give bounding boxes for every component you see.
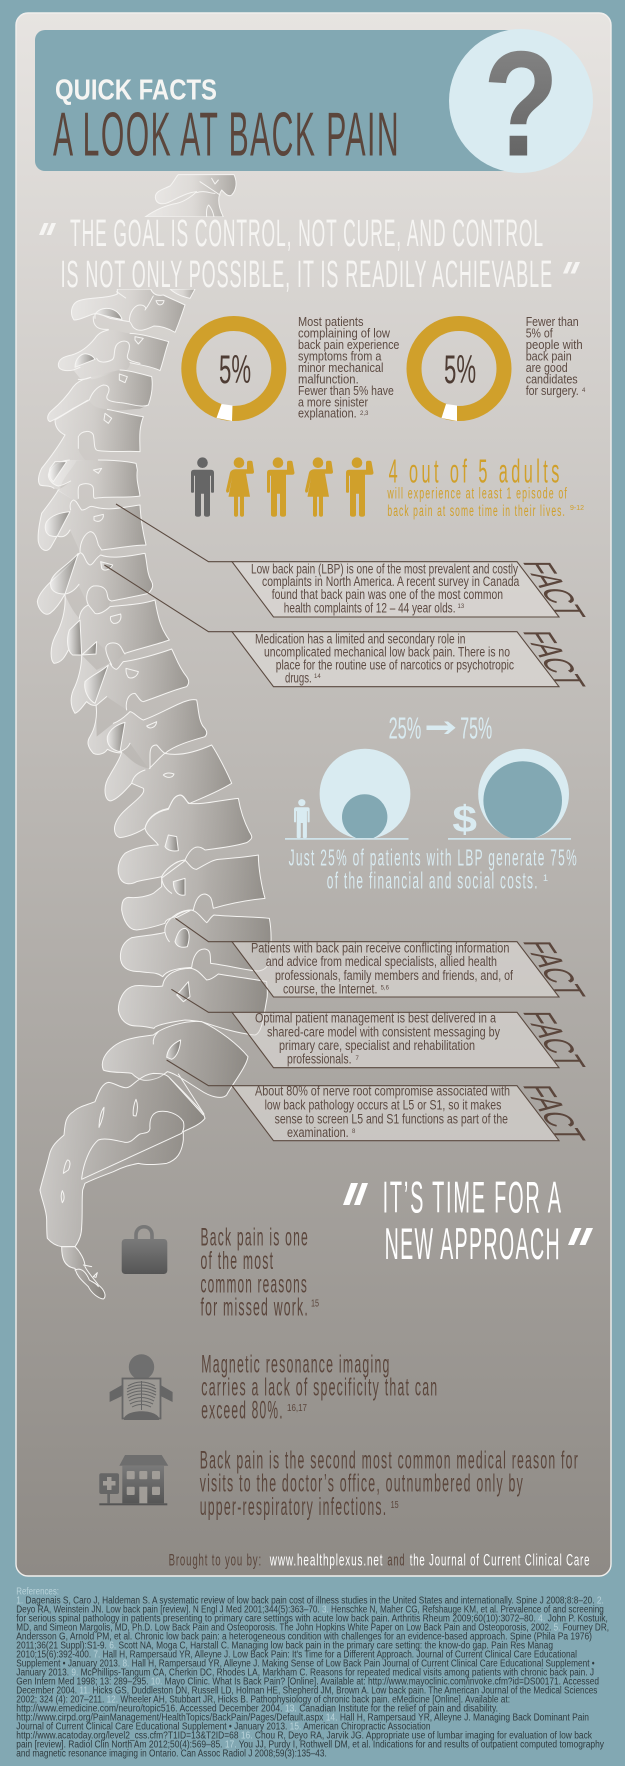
text: 4 out of 5 adults: 9-12 [570,505,584,512]
fact text: found that back pain was one of the most common [272,587,503,602]
reference list: for serious spinal pathology in patients presenting to primary care settings with acute low back pain. Arthritis Rheum 2009;60(10):3072–80. 4. John P. Kostuik, [16,1613,608,1624]
text: fewer than 5 percent: back pain [526,349,572,364]
text: most patients: minor mechanical [298,360,383,375]
title banner [35,20,593,188]
text: most patients: symptoms from a [298,349,382,364]
fact text: professionals. [287,1052,352,1067]
fact text: primary care, specialist and rehabilitation [279,1038,475,1053]
fact text: course, the Internet. [283,982,377,997]
icon: gold man [346,457,374,517]
box [232,632,559,687]
text: just 25 percent [289,845,578,893]
label: 25% arrow 75% [389,711,492,746]
text: fewer than 5 percent: 4 [582,388,586,394]
fact text: Patients with back pain receive conflicting information [251,940,509,955]
quote: new approach [343,1173,593,1269]
text: most patients: Fewer than 5% have [298,383,394,398]
text: second most common: 15 [391,1500,399,1511]
spine illustration [37,175,271,1299]
text: second most common [200,1447,579,1521]
fact text: place for the routine use of narcotics or psychotropic [276,658,514,673]
reference list: and magnetic resonance imaging in Ontario. Can Assoc Radiol J 2008;59(3):135–43. [16,1748,327,1759]
text: magnetic resonance: exceed 80%. [201,1396,284,1424]
text: most patients: a more sinister [298,394,369,409]
fact text: About 80% of nerve root compromise associated with [255,1084,510,1099]
text: back pain missed work: for missed work. [200,1293,309,1321]
text: back pain missed work [200,1224,319,1321]
fact text: 7 [356,1056,360,1062]
fact box: nerve root compromise [167,1060,593,1141]
heading: quick facts: QUICK FACTS [55,74,217,106]
fact text [251,940,513,997]
fact text: uncomplicated mechanical low back pain. There is no [264,645,510,660]
FACT label: FACT [513,1011,593,1068]
text: second most common: upper-respiratory infections. [200,1493,387,1521]
fact box: conflicting information [175,918,593,997]
fact text: sense to screen L5 and S1 functions as part of the [275,1111,508,1126]
text: most patients [298,314,399,421]
stat: donut 5 percent mechanical [189,314,399,421]
credit line: www.healthplexus.net [269,1551,383,1570]
leader line [116,504,232,562]
stat: donut 5 percent surgery [414,314,586,421]
fact text [251,561,520,615]
text: fewer than 5 percent: 5% of [526,326,553,341]
text: fewer than 5 percent: candidates [526,371,578,386]
fact text [255,1084,510,1140]
fact text: 8 [352,1129,356,1135]
stat: missed work [122,1224,319,1321]
text: most patients: complaining of low [298,326,391,341]
box [232,562,559,617]
box [232,1012,559,1068]
fact text: shared-care model with consistent messaging by [267,1024,500,1039]
label: 25% arrow 75%: 75% [460,711,492,746]
text: back pain missed work: common reasons [200,1270,308,1298]
fact box: shared care [171,989,593,1068]
credit line [169,1551,590,1570]
infographic: 25 percent to 75 percent [285,711,578,893]
text: magnetic resonance [201,1350,438,1424]
icon: gold man [267,457,294,517]
fact text [255,1010,500,1067]
stat: doctor's office [99,1447,579,1521]
label: 25% arrow 75%: 25% [389,711,421,746]
text: back pain missed work: 15 [311,1298,319,1310]
text: most patients: Most patients [298,314,364,329]
icon: gold woman [226,457,254,517]
leader line [175,918,232,942]
fact text: Optimal patient management is best delivered in a [255,1010,496,1025]
reference list: 2011;36(21 Suppl):S1-9. 6. Scott NA, Moga C, Harstall C. Managing low back pain in the primary care setting: the know-do gap. Pain Res Manag [16,1640,553,1651]
text: just 25 percent: 1 [543,873,548,883]
donut chart right [414,324,504,421]
fact text: professionals, family members and friends, and, of [275,968,513,983]
donut chart right: 5% [444,348,476,392]
text: most patients: malfunction. [298,371,359,386]
text: most patients: explanation. [298,406,357,421]
fact text: Low back pain (LBP) is one of the most prevalent and costly [251,561,518,576]
donut chart left: 5% [219,348,251,392]
leader line [171,989,232,1012]
donut chart left [189,324,279,421]
icon: question mark circle [449,20,593,188]
fact text: and advice from medical specialists, allied health [266,954,497,969]
text: back pain missed work: Back pain is one [200,1224,309,1252]
fact text: drugs. [285,671,312,686]
fact box: low back pain prevalence [116,504,593,618]
text: back pain missed work: of the most [200,1247,274,1275]
references heading: References: [16,1586,59,1597]
reference list: Journal of Current Clinical Care Educational Supplement • January 2013. 15. American Chiropractic Association [16,1721,431,1732]
references [16,1586,609,1759]
reference list: 2002; 324 (4): 207–211. 12. Wheeler AH, Stubbart JR, Hicks B. Pathophysiology of chronic back pain. eMedicine [Online]. Available at: [16,1694,510,1705]
fact text: low back pathology occurs at L5 or S1, so it makes [265,1098,502,1113]
text: fewer than 5 percent: are good [526,360,568,375]
fact text: Medication has a limited and secondary role in [255,631,466,646]
leader line [104,565,232,632]
fact text: complaints in North America. A recent survey in Canada [262,574,520,589]
text: 4 out of 5 adults [387,452,584,520]
icon: hospital [99,1455,168,1505]
pictogram: 4 out of 5 adults [191,452,584,520]
fact text: examination. [287,1125,349,1140]
text: most patients: 2,3 [360,411,369,417]
reference list: http://www.cirpd.org/PainManagement/HealthTopics/BackPain/Pages/Default.aspx 14. Hall H, Rampersaud YR, Alleyne J. Managing Back Dominant Pain [16,1712,589,1723]
circles: costs [448,749,571,840]
text: fewer than 5 percent: people with [526,337,583,352]
text: fewer than 5 percent: for surgery. [526,383,579,398]
circles: patients [285,749,410,840]
icon: gold woman [305,457,333,517]
reference list: http://www.emedicine.com/neuro/topic516. Accessed December 2004. 13. Canadian Institute for the relief of pain and disability. [16,1703,498,1714]
fact text: 5,6 [381,986,390,992]
box [232,942,559,997]
fact text: 13 [458,604,465,610]
icon: question mark circle: ? [483,20,559,188]
reference list [16,1595,609,1759]
icon: grey man [191,457,214,517]
text: magnetic resonance: 16,17 [287,1403,307,1414]
fact box: medication [104,565,593,687]
FACT label: FACT [513,561,593,618]
icon: x-ray [110,1354,173,1420]
text: most patients: back pain experience [298,337,399,352]
FACT label: FACT [513,940,593,997]
text: magnetic resonance: Magnetic resonance imaging [201,1350,391,1378]
text: fewer than 5 percent: Fewer than [526,314,579,329]
icon: briefcase [122,1227,167,1274]
fact text: health complaints of 12 – 44 year olds. [284,600,456,615]
fact text [255,631,514,686]
fact text: 14 [314,674,321,680]
stat: magnetic resonance imaging [110,1350,438,1424]
icon: dollar sign: $ [452,799,477,841]
quote: goal is control [39,213,580,296]
icon: small man [294,799,310,838]
leader line [167,1060,232,1086]
box [232,1086,559,1141]
text: fewer than 5 percent [526,314,586,398]
FACT label: FACT [513,630,593,687]
FACT label: FACT [513,1084,593,1141]
credit line: and [387,1551,405,1570]
credit line: Brought to you by: [169,1551,262,1570]
banner background [35,30,525,171]
